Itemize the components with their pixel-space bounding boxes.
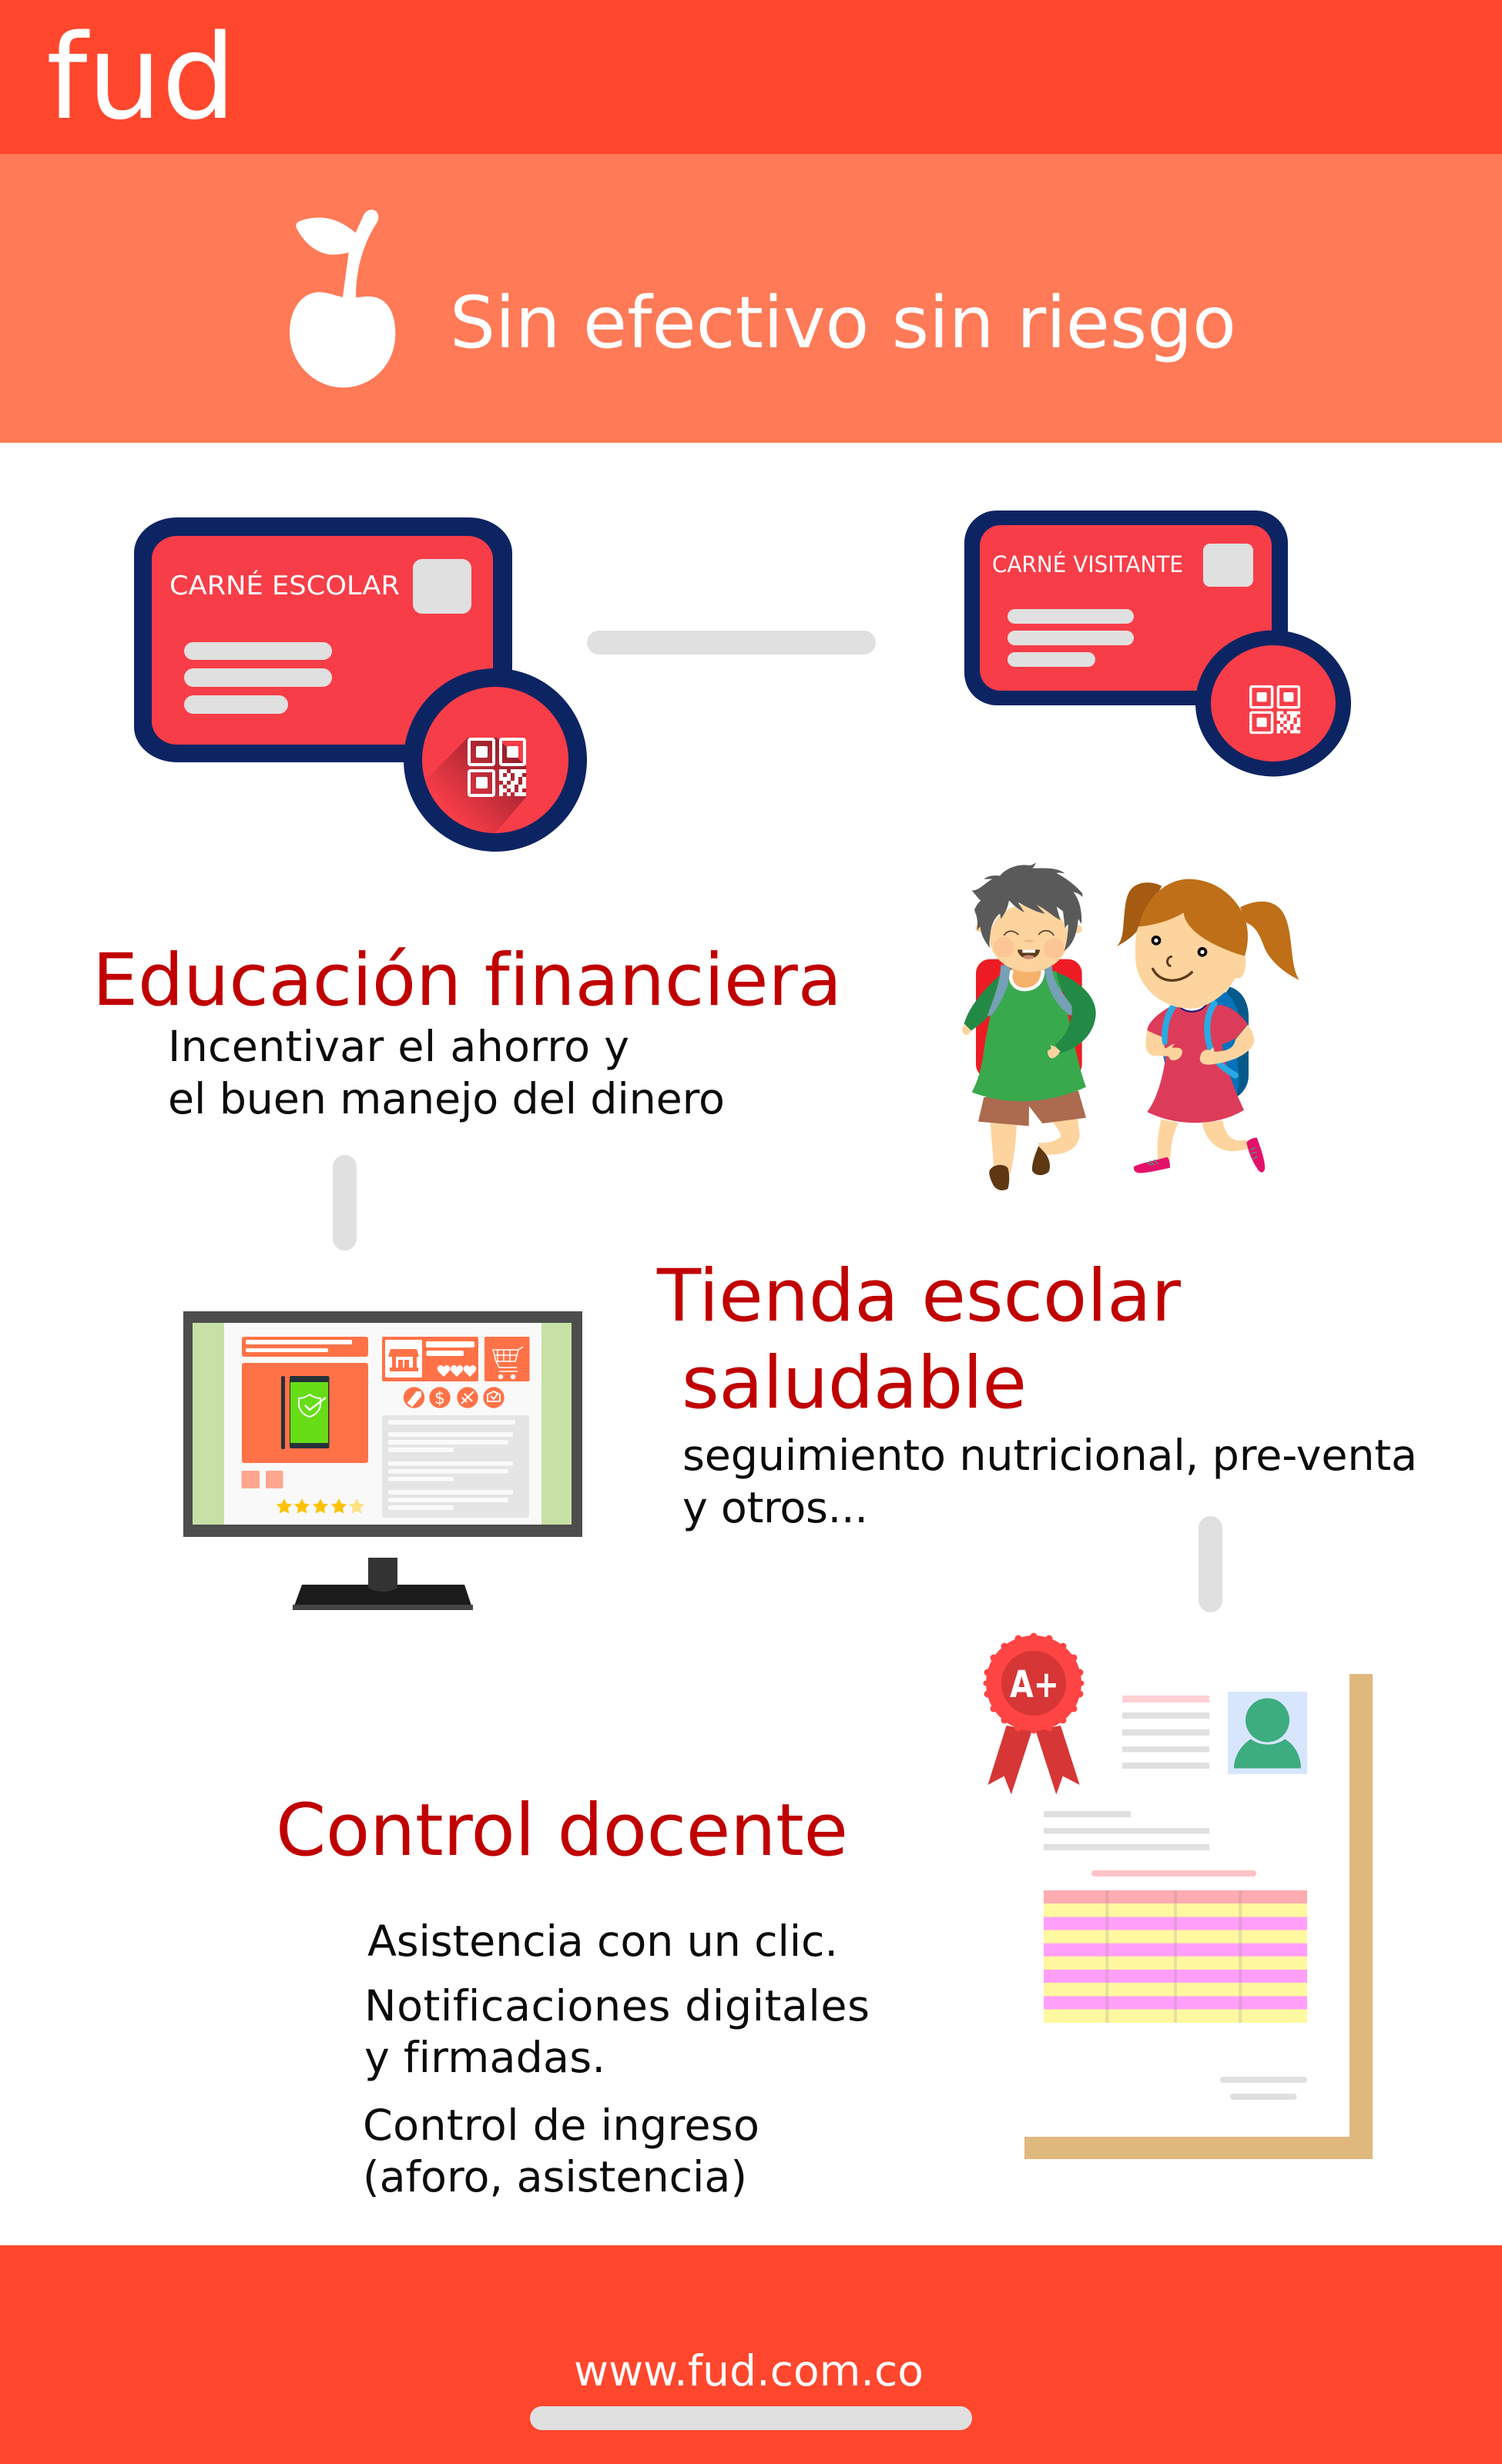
icon: qr code [469, 739, 526, 796]
website: www.fud.com.co [574, 2346, 924, 2395]
card: carné escolar [134, 517, 587, 852]
icon: qr code [1251, 687, 1300, 733]
footer [0, 2245, 1502, 2464]
illustration: monitor with online store [183, 1311, 582, 1610]
text: educación financiera: el buen manejo del dinero [168, 1074, 725, 1124]
connector: vertical right [1199, 1516, 1222, 1612]
text panel [382, 1415, 529, 1518]
card label: CARNÉ ESCOLAR [169, 570, 400, 601]
text: tienda escolar: y otros... [682, 1483, 868, 1533]
table [1044, 1890, 1307, 2023]
photo [1228, 1692, 1307, 1774]
badge: rosette A+: A+ [1010, 1663, 1059, 1706]
illustration: children [962, 862, 1299, 1190]
text: control docente: (aforo, asistencia) [363, 2152, 747, 2202]
heading: tienda escolar saludable: saludable [682, 1341, 1027, 1425]
boy [962, 862, 1096, 1190]
banner title: Sin efectivo sin riesgo [450, 281, 1236, 364]
connector: horizontal [587, 631, 876, 654]
illustration: report card [983, 1632, 1373, 2159]
text: control docente [363, 1917, 870, 2202]
text: control docente: Control de ingreso [363, 2101, 759, 2151]
girl [1117, 879, 1299, 1173]
icon: phone with shield [281, 1376, 330, 1449]
icon: cart [493, 1347, 523, 1378]
card label: CARNÉ VISITANTE [992, 551, 1183, 578]
icon: cherry [290, 209, 395, 387]
paper shadow frame [1024, 1674, 1373, 2159]
text: tienda escolar [682, 1431, 1417, 1533]
text: control docente: Asistencia con un clic. [367, 1917, 838, 1967]
heading: educación financiera: Educación financiera [92, 939, 842, 1023]
heading: tienda escolar saludable [656, 1254, 1182, 1425]
rating stars [277, 1498, 364, 1514]
badge: rosette A+ [983, 1632, 1085, 1794]
header bar [0, 0, 1502, 154]
brand name: fud [46, 9, 236, 146]
text: educación financiera: Incentivar el ahorro y [168, 1022, 629, 1072]
text: educación financiera [168, 1022, 725, 1124]
heading: tienda escolar saludable: Tienda escolar [656, 1254, 1182, 1338]
text: control docente: y firmadas. [364, 2033, 605, 2083]
monitor stand [293, 1585, 473, 1610]
card: carné visitante [964, 511, 1351, 776]
icons: round badges: $ [434, 1389, 445, 1408]
connector: vertical left [333, 1155, 357, 1250]
text: control docente: Notificaciones digitales [364, 1981, 870, 2031]
heading: control docente: Control docente [276, 1789, 848, 1873]
icons: round badges [408, 1389, 500, 1408]
text: tienda escolar: seguimiento nutricional, pre-venta [682, 1431, 1417, 1481]
icon: store [388, 1349, 419, 1371]
banner [0, 154, 1502, 443]
